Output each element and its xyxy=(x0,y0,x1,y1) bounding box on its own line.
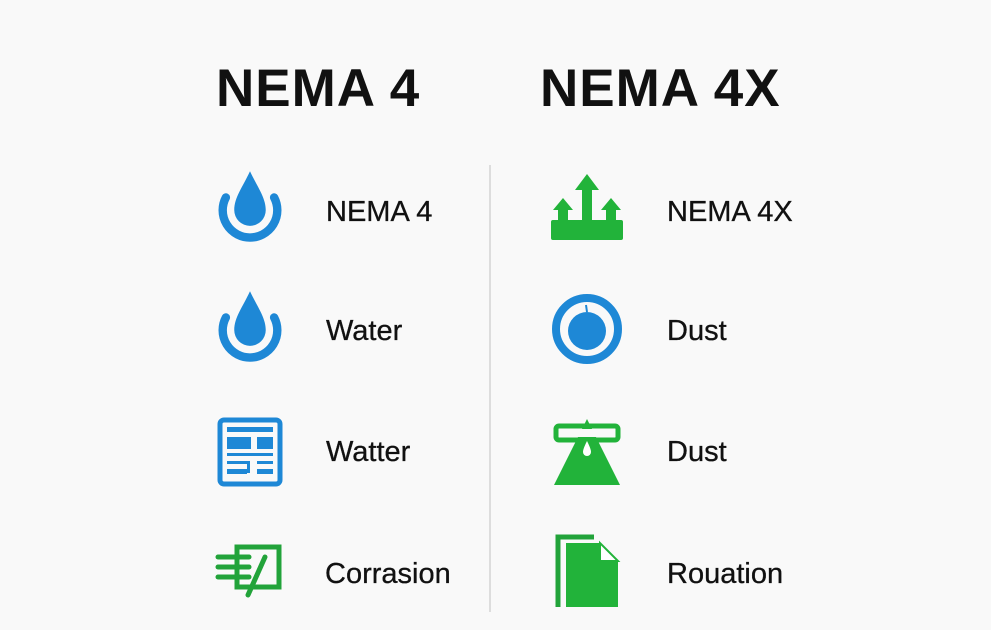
label: Watter: Watter xyxy=(326,436,410,468)
icon: water drop 1 xyxy=(218,171,282,242)
icon: document xyxy=(556,534,620,607)
icon: tower xyxy=(554,419,620,485)
divider xyxy=(489,165,491,612)
label: Water: Water xyxy=(326,315,402,347)
label: Dust: Dust xyxy=(667,436,727,468)
title: NEMA 4: NEMA 4 xyxy=(216,59,420,118)
label: NEMA 4: NEMA 4 xyxy=(326,196,432,228)
icon: arrows xyxy=(551,174,623,240)
icon: corrosion xyxy=(216,544,282,598)
label: Rouation: Rouation xyxy=(667,558,783,590)
icon: dust circle xyxy=(552,294,622,364)
icon: water drop 2 xyxy=(218,291,282,362)
label: NEMA 4X: NEMA 4X xyxy=(667,196,793,228)
label: Dust: Dust xyxy=(667,315,727,347)
title: NEMA 4X: NEMA 4X xyxy=(540,59,781,118)
label: Corrasion: Corrasion xyxy=(325,558,451,590)
icon: panel xyxy=(218,418,282,486)
